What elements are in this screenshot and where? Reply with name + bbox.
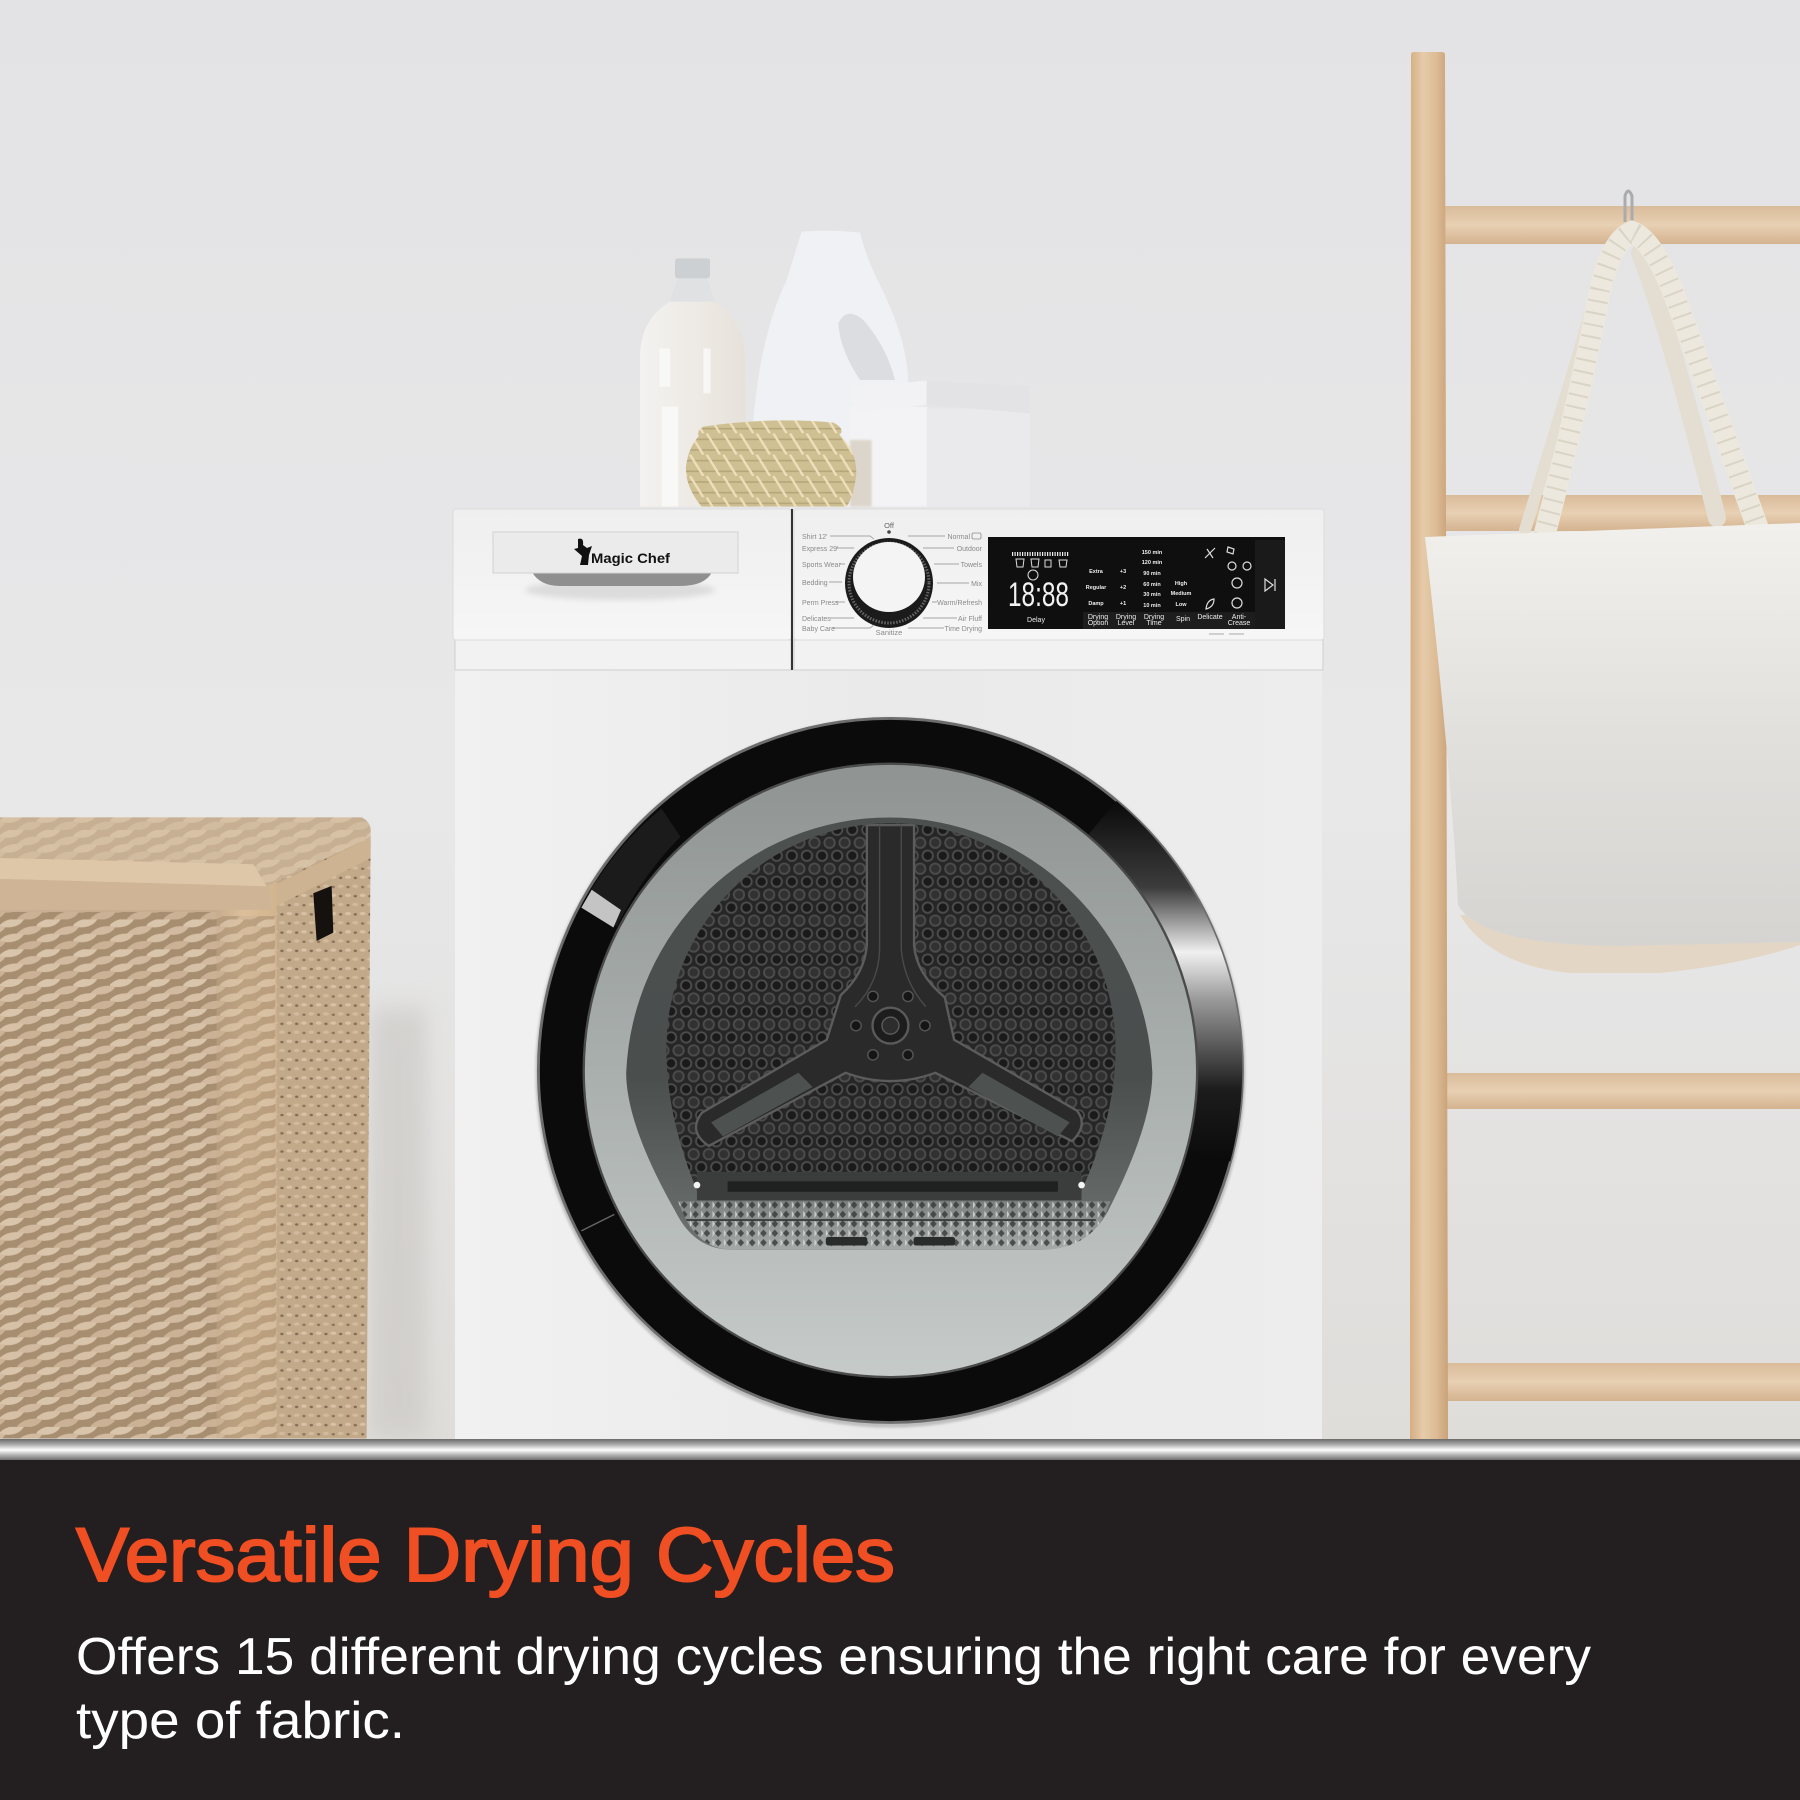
milk bottle <box>640 258 747 507</box>
hamper handle hole <box>313 886 333 941</box>
ladder rung 4 <box>1445 1363 1800 1401</box>
display option labels: 30 min <box>1143 592 1161 598</box>
dial labels right: Time Drying <box>945 626 982 633</box>
hamper rim <box>0 877 272 910</box>
drawer panel <box>453 509 791 640</box>
display button labels: Level <box>1118 620 1135 627</box>
display option labels: +2 <box>1120 585 1126 591</box>
top strip left <box>455 640 791 670</box>
hamper weave texture <box>0 912 217 1438</box>
bottles and basket on washer <box>640 231 1030 507</box>
display button labels: Spin <box>1176 616 1190 623</box>
box body front <box>850 407 927 507</box>
hub center <box>882 1017 899 1034</box>
brand logo <box>574 539 670 566</box>
wooden ladder <box>1410 52 1800 1440</box>
display button labels: Option <box>1088 620 1108 627</box>
display button labels: Delay <box>1027 617 1045 624</box>
sanitize label: Sanitize <box>876 628 902 637</box>
dial labels left <box>802 534 841 633</box>
glass corner glint right <box>1078 1182 1085 1188</box>
silver divider bar <box>0 1439 1800 1460</box>
dial leader lines <box>829 536 969 628</box>
box lid front <box>850 381 927 412</box>
white box <box>850 381 1030 507</box>
display button labels: Anti- <box>1232 614 1247 621</box>
display panel <box>988 537 1285 629</box>
jug body <box>751 231 908 507</box>
box body side <box>927 408 1030 507</box>
caption panel <box>0 1460 1800 1800</box>
display option labels: Low <box>1176 602 1187 608</box>
dial teeth <box>849 543 929 623</box>
dial labels left: Sports Wear <box>802 562 841 569</box>
start pause icon <box>1265 579 1275 591</box>
mesh vent left <box>826 1237 867 1246</box>
display button labels: Drying <box>1144 614 1164 621</box>
bottle body <box>640 302 747 507</box>
dryer door <box>536 718 1245 1428</box>
time readout: 18:88 <box>1008 576 1069 614</box>
display option labels: 120 min <box>1142 560 1163 566</box>
display option labels: Regular <box>1086 585 1107 591</box>
display option labels: 90 min <box>1143 571 1161 577</box>
hamper corner column <box>217 916 277 1438</box>
bag rope inner right <box>1640 253 1717 518</box>
glass bowl <box>626 817 1152 1250</box>
hamper lid front edge <box>0 858 267 886</box>
garment icons <box>1016 559 1067 567</box>
display option labels: Extra <box>1089 569 1104 575</box>
display option labels: 60 min <box>1143 582 1161 588</box>
display option labels <box>1086 550 1191 609</box>
display option labels: Damp <box>1088 601 1104 607</box>
spider paddles <box>696 825 1082 1146</box>
display background <box>988 537 1285 629</box>
heading: Versatile Drying Cycles <box>76 1513 895 1598</box>
ladder pole <box>1410 52 1448 1440</box>
detergent jug <box>751 231 908 507</box>
dial labels right: Air Fluff <box>958 616 982 623</box>
dial labels left: Express 29' <box>802 546 838 553</box>
basket lid <box>698 420 841 439</box>
mesh diamonds <box>671 1201 1110 1248</box>
wall background <box>0 0 1800 1440</box>
top strip right <box>794 640 1323 670</box>
display button labels: Drying <box>1088 614 1108 621</box>
ladder rung 3 <box>1445 1073 1800 1109</box>
display button labels: Time <box>1146 620 1162 627</box>
off label: Off <box>884 521 895 530</box>
jug handle hole <box>838 314 895 380</box>
bag rope twist <box>1541 232 1762 548</box>
mesh divider <box>680 1219 1096 1221</box>
hamper front <box>0 875 277 1438</box>
display option labels: 10 min <box>1143 603 1161 609</box>
box lid side <box>927 381 1030 413</box>
display option labels: +1 <box>1120 601 1126 607</box>
door outer black ring <box>538 718 1242 1422</box>
description text <box>76 1628 1591 1750</box>
hamper lid texture <box>0 817 371 886</box>
bag rope main <box>1541 232 1762 548</box>
description line 1: Offers 15 different drying cycles ensuring the right care for every <box>76 1628 1591 1686</box>
drawer recess <box>532 572 712 586</box>
progress ticks <box>1012 552 1069 556</box>
hub bolts <box>851 991 930 1060</box>
perforated drum <box>666 823 1116 1191</box>
drum lip dark band <box>728 1181 1058 1192</box>
drawer handle <box>493 532 738 573</box>
cycle dial <box>845 530 933 628</box>
ladder rung 2 <box>1445 495 1800 531</box>
drawer recess shadow <box>525 580 715 600</box>
bottle neck <box>669 278 715 302</box>
chrome reflection top left <box>582 809 680 927</box>
basket shadow <box>850 440 872 507</box>
display button labels: Drying <box>1116 614 1136 621</box>
chef icon <box>574 539 592 565</box>
panel seam <box>791 509 793 670</box>
control panel <box>794 509 1324 640</box>
description line 2: type of fabric. <box>76 1692 405 1750</box>
wicker hamper <box>0 817 427 1438</box>
dial labels right: Outdoor <box>957 546 983 553</box>
paddle ridge <box>855 825 926 1007</box>
display button labels: Delicate <box>1197 614 1223 621</box>
normal cycle marker <box>972 533 981 539</box>
dial ring <box>845 538 933 628</box>
mesh base <box>671 1200 1110 1252</box>
hamper shadow on wall <box>370 1007 427 1438</box>
dial labels left: Perm Press <box>802 600 839 607</box>
clock icon <box>1028 570 1038 580</box>
hanging tote bag <box>1425 191 1800 973</box>
washer dryer appliance <box>453 509 1324 1440</box>
display button labels <box>1027 614 1250 627</box>
right touch strip <box>1255 540 1285 629</box>
bag body <box>1425 523 1800 946</box>
bottle highlights <box>659 348 711 507</box>
bag hook <box>1625 191 1632 222</box>
door seam <box>581 1214 614 1231</box>
bottle cap <box>675 258 710 278</box>
hamper side rim <box>267 837 371 909</box>
door shadow <box>536 718 1245 1428</box>
display option labels: High <box>1175 581 1188 587</box>
dial labels right: Warm/Refresh <box>937 600 982 607</box>
dial knob <box>853 542 925 612</box>
chrome reflection right <box>1088 801 1242 1162</box>
appliance body <box>455 670 1322 1440</box>
drum hub <box>873 1008 908 1044</box>
dial labels left: Baby Care <box>802 626 835 633</box>
display option labels: +3 <box>1120 569 1126 575</box>
chrome notch <box>581 890 621 927</box>
display option labels: Medium <box>1171 591 1191 597</box>
paddle inset left <box>711 1073 813 1137</box>
mesh vent right <box>914 1237 955 1246</box>
dial labels right <box>937 534 983 633</box>
metal mesh floor <box>671 1200 1110 1252</box>
dial labels left: Delicates <box>802 616 831 623</box>
display status icons <box>1205 547 1251 609</box>
glass corner glint left <box>694 1182 700 1188</box>
dial labels right: Mix <box>971 581 982 588</box>
hamper side <box>263 835 371 1438</box>
paddle inset right <box>968 1073 1070 1137</box>
display button labels: Crease <box>1228 620 1250 627</box>
drum lower lip <box>697 1172 1082 1200</box>
dial labels left: Shirt 12' <box>802 534 827 541</box>
bag flap <box>1460 915 1800 973</box>
hamper lid <box>0 817 371 886</box>
dial labels left: Bedding <box>802 580 828 587</box>
straw basket <box>686 420 856 507</box>
drum spider <box>696 825 1082 1146</box>
silver ring <box>584 764 1197 1377</box>
dial labels right: Towels <box>961 562 982 569</box>
brand name: Magic Chef <box>591 550 670 566</box>
off marker <box>887 530 891 534</box>
display option labels: 150 min <box>1142 550 1163 556</box>
ladder rung 1 <box>1445 206 1800 244</box>
basket body <box>686 435 856 507</box>
bottom button cells <box>1083 612 1255 629</box>
bag rope inner left <box>1525 280 1600 530</box>
panel indicator <box>1209 633 1244 635</box>
dial labels right: Normal <box>947 534 970 541</box>
